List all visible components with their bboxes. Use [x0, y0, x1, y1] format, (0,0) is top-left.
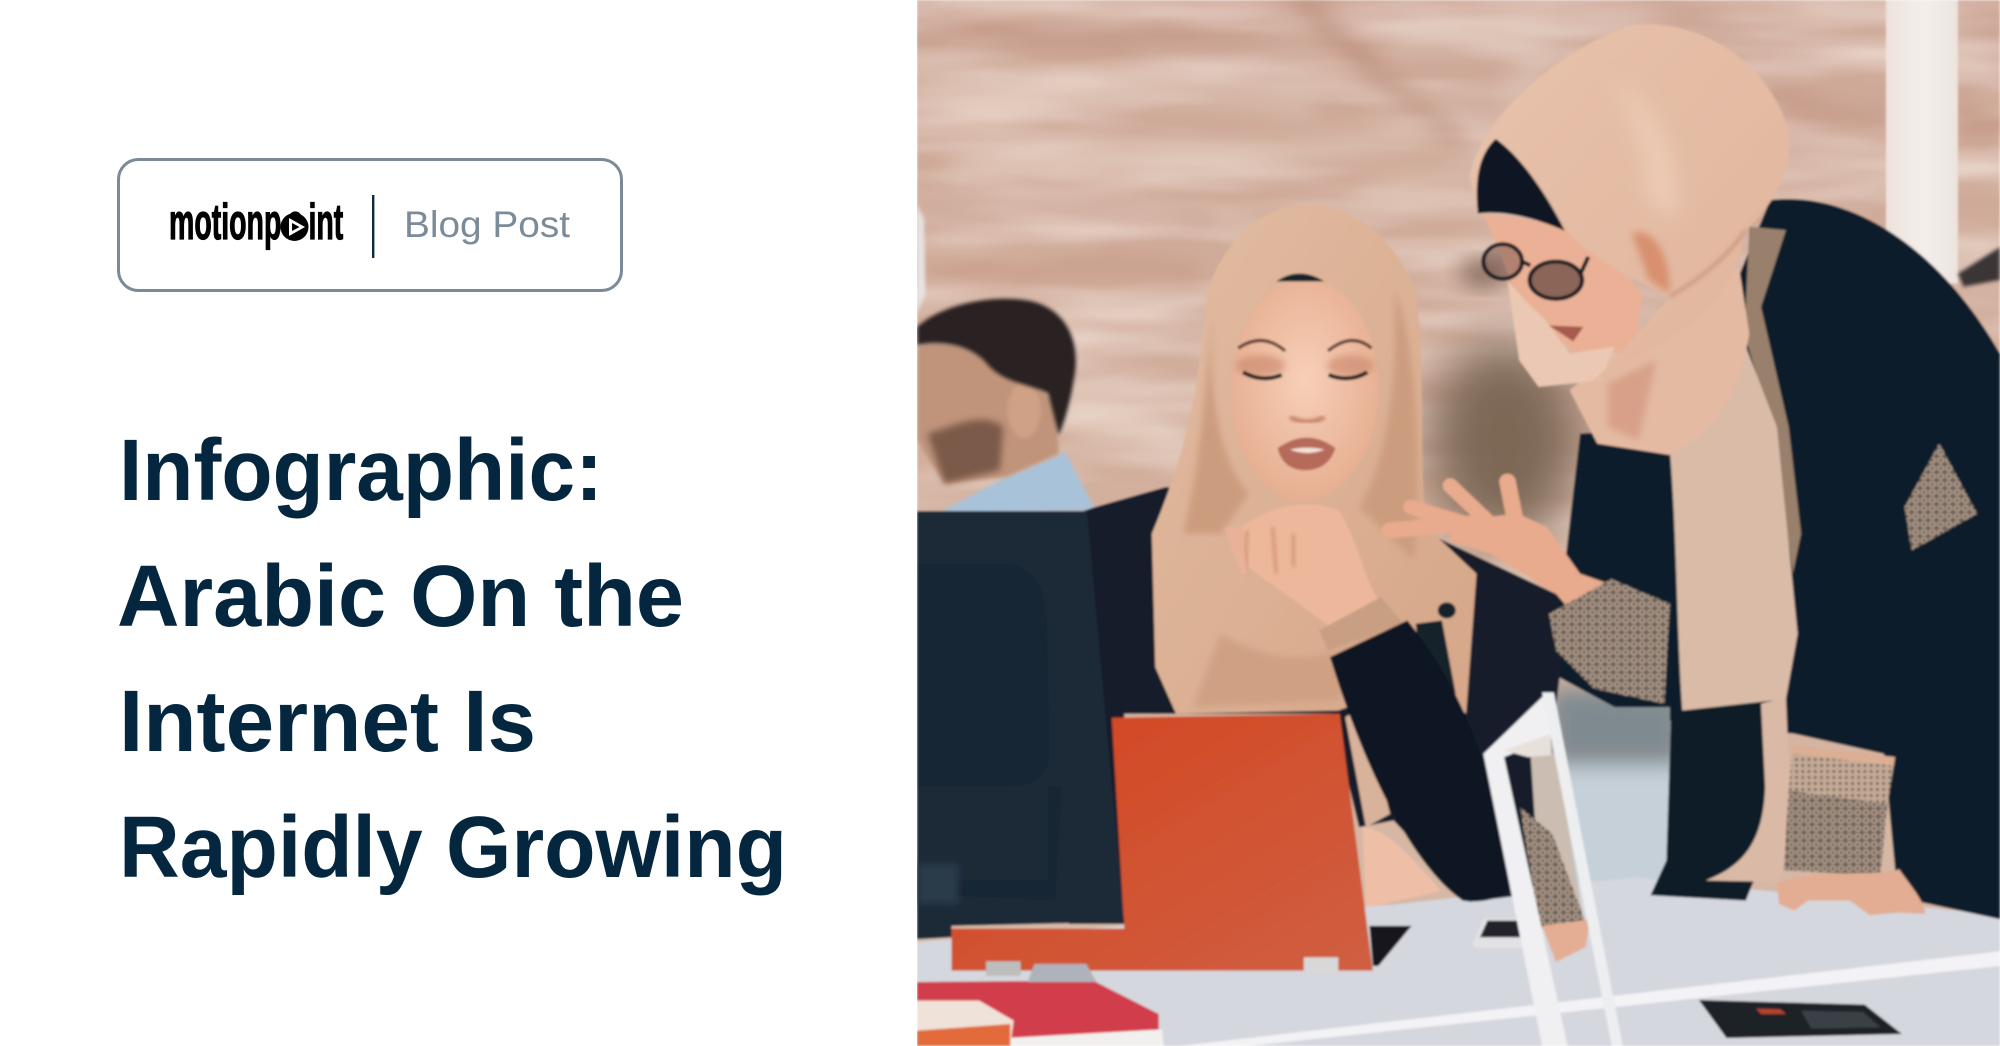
blurred plant	[1428, 259, 1580, 540]
black drape	[1651, 700, 1770, 901]
right woman: abaya	[1552, 199, 2000, 919]
blog post label: Blog Post	[404, 204, 571, 245]
pale scarf lower end	[1706, 697, 1793, 882]
lace cuff	[1549, 579, 1670, 704]
right woman: face	[1476, 139, 1642, 387]
phone	[1472, 919, 1530, 948]
red laptop	[952, 714, 1412, 976]
embroidered sleeve patch	[1905, 444, 1977, 550]
wristwatch	[1319, 597, 1403, 650]
left woman: face	[1232, 274, 1378, 502]
left woman: wrist and hand on desk	[1362, 827, 1441, 907]
right woman: hijab	[1470, 25, 1790, 384]
left woman: body	[1055, 487, 1570, 924]
right woman: veil and neck wrap	[1570, 267, 1798, 710]
embroidery trim	[1744, 227, 1801, 574]
motionpoint logo: motionpoint	[169, 194, 344, 250]
title: Arabic On the	[117, 548, 684, 645]
title: Infographic:	[119, 422, 603, 519]
left woman: forearm	[1330, 620, 1511, 901]
desk	[917, 877, 2000, 1046]
right hand on desk	[1777, 869, 1925, 915]
desktop monitor	[917, 511, 1124, 939]
glasses	[1483, 244, 1588, 299]
picture frame on desk	[1483, 692, 1623, 1046]
photo: two women at a laptop in an office	[917, 0, 2000, 1046]
panel: left text panel	[117, 158, 787, 896]
background furniture	[1549, 687, 1684, 894]
calculator	[1699, 1000, 1902, 1038]
right woman: gesturing hand	[1390, 482, 1618, 657]
title: Internet Is	[119, 673, 536, 770]
white pillar	[1886, 0, 2000, 287]
wall background	[917, 0, 2000, 1046]
left woman: chin hand	[1224, 504, 1380, 630]
left woman: hijab	[1152, 204, 1476, 827]
man in background	[917, 298, 1095, 514]
logo badge	[118, 160, 622, 290]
title	[117, 422, 787, 896]
sleeve cuff	[1784, 746, 1895, 875]
red books	[917, 964, 1164, 1046]
title: Rapidly Growing	[119, 799, 787, 896]
